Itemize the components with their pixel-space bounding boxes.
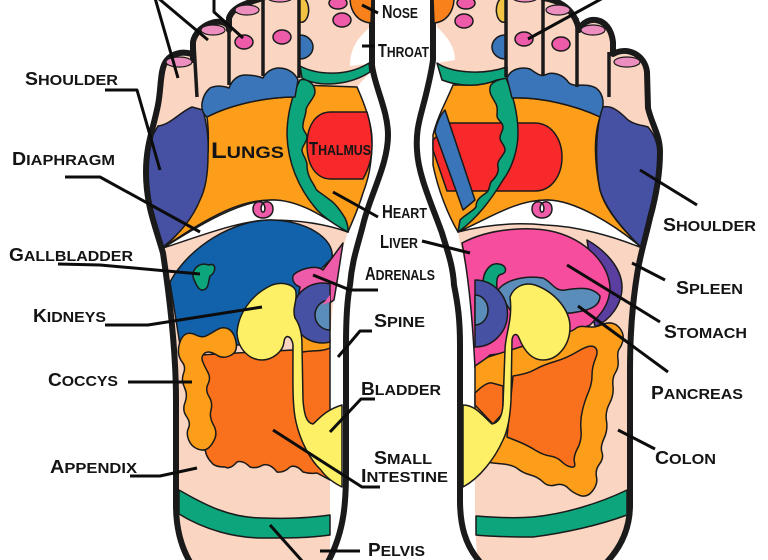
label: small: SMALL — [374, 448, 432, 468]
zone: shoulder — [597, 107, 658, 248]
zone: thalmus — [307, 112, 372, 179]
label: colon: COLON — [655, 448, 716, 468]
toe dividers — [506, 0, 609, 97]
zone: pelvis band — [476, 490, 627, 537]
outline: left foot inner edge — [328, 0, 388, 560]
label: lungs: LUNGS — [211, 138, 284, 163]
icon: gallbladder spot — [483, 264, 506, 300]
zone: shoulder — [147, 107, 208, 247]
label: shoulder right: SHOULDER — [663, 215, 756, 235]
label: pelvis: PELVIS — [368, 540, 425, 560]
zone: heart reflex band — [458, 78, 518, 232]
zone: diaphragm — [163, 200, 348, 248]
icon: gallbladder spot — [193, 264, 215, 290]
label: gallbladder: GALLBLADDER — [9, 245, 133, 265]
zone: blue diagonal — [435, 110, 475, 210]
orange region: upper foot — [300, 85, 372, 232]
label: throat: THROAT — [378, 41, 429, 61]
zone: stomach — [462, 229, 610, 368]
zone: lungs — [163, 97, 348, 248]
label: spleen: SPLEEN — [676, 278, 743, 298]
left foot — [146, 0, 388, 560]
label: stomach: STOMACH — [664, 322, 747, 342]
label: thalmus: THALMUS — [309, 139, 371, 159]
toe nails — [166, 0, 292, 67]
zone: upper ridge — [202, 68, 298, 117]
zone: colon left — [178, 328, 236, 450]
icon: diaphragm heart — [253, 202, 273, 218]
label: intestine: INTESTINE — [361, 466, 448, 486]
label: liver: LIVER — [380, 232, 418, 252]
zone: diaphragm — [458, 200, 642, 248]
zone: heart reflex band — [287, 80, 348, 232]
zone: orange upper foot — [433, 80, 642, 248]
label: diaphragm: DIAPHRAGM — [12, 149, 115, 169]
toe spots — [235, 0, 372, 59]
zone: red reflex area — [433, 123, 562, 191]
skin: left foot — [146, 0, 372, 560]
zone: pelvis band — [179, 490, 330, 538]
zone: throat band — [300, 63, 370, 84]
icon: diaphragm heart — [532, 202, 552, 218]
label: pancreas: PANCREAS — [651, 383, 743, 403]
toe nails — [513, 0, 640, 67]
zone: small intestine — [507, 346, 597, 467]
zone: small intestine — [200, 348, 330, 480]
zone: ring centre — [315, 300, 330, 330]
zone: liver — [170, 220, 332, 345]
zone: small intestine inner part — [475, 383, 503, 424]
zone: pancreas — [498, 277, 600, 313]
right foot — [417, 0, 660, 560]
lighter orange under ring — [293, 330, 330, 352]
skin: right foot — [433, 0, 660, 560]
outline: left foot outer edge — [146, 53, 192, 560]
label: heart: HEART — [382, 202, 427, 222]
zone: spleen — [587, 240, 622, 327]
zone: ring highlight — [322, 295, 330, 305]
label: coccys: COCCYS — [48, 370, 118, 390]
label: nose: NOSE — [382, 2, 418, 22]
toe dividers — [194, 0, 299, 97]
zone: kidney and bladder — [237, 283, 342, 487]
label: appendix: APPENDIX — [50, 457, 137, 477]
label: shoulder left: SHOULDER — [25, 69, 118, 89]
label: kidneys: KIDNEYS — [33, 306, 106, 326]
zone: adrenals — [293, 243, 343, 320]
label: bladder: BLADDER — [361, 379, 441, 399]
zone: ring centre — [475, 295, 488, 325]
zone: upper ridge — [507, 68, 603, 117]
label: adrenals: ADRENALS — [365, 264, 435, 284]
zone: kidney and bladder — [463, 284, 570, 487]
zone: colon right — [475, 323, 623, 496]
zone: throat band — [437, 63, 507, 85]
label: spine: SPINE — [374, 311, 425, 331]
toe spots — [433, 0, 570, 59]
zone: kidney ring — [475, 280, 507, 347]
outline: toes — [193, 0, 263, 60]
outline: right foot outer edge — [543, 0, 660, 560]
zone: kidney ring — [292, 283, 330, 343]
outline: right foot inner edge — [417, 0, 480, 560]
